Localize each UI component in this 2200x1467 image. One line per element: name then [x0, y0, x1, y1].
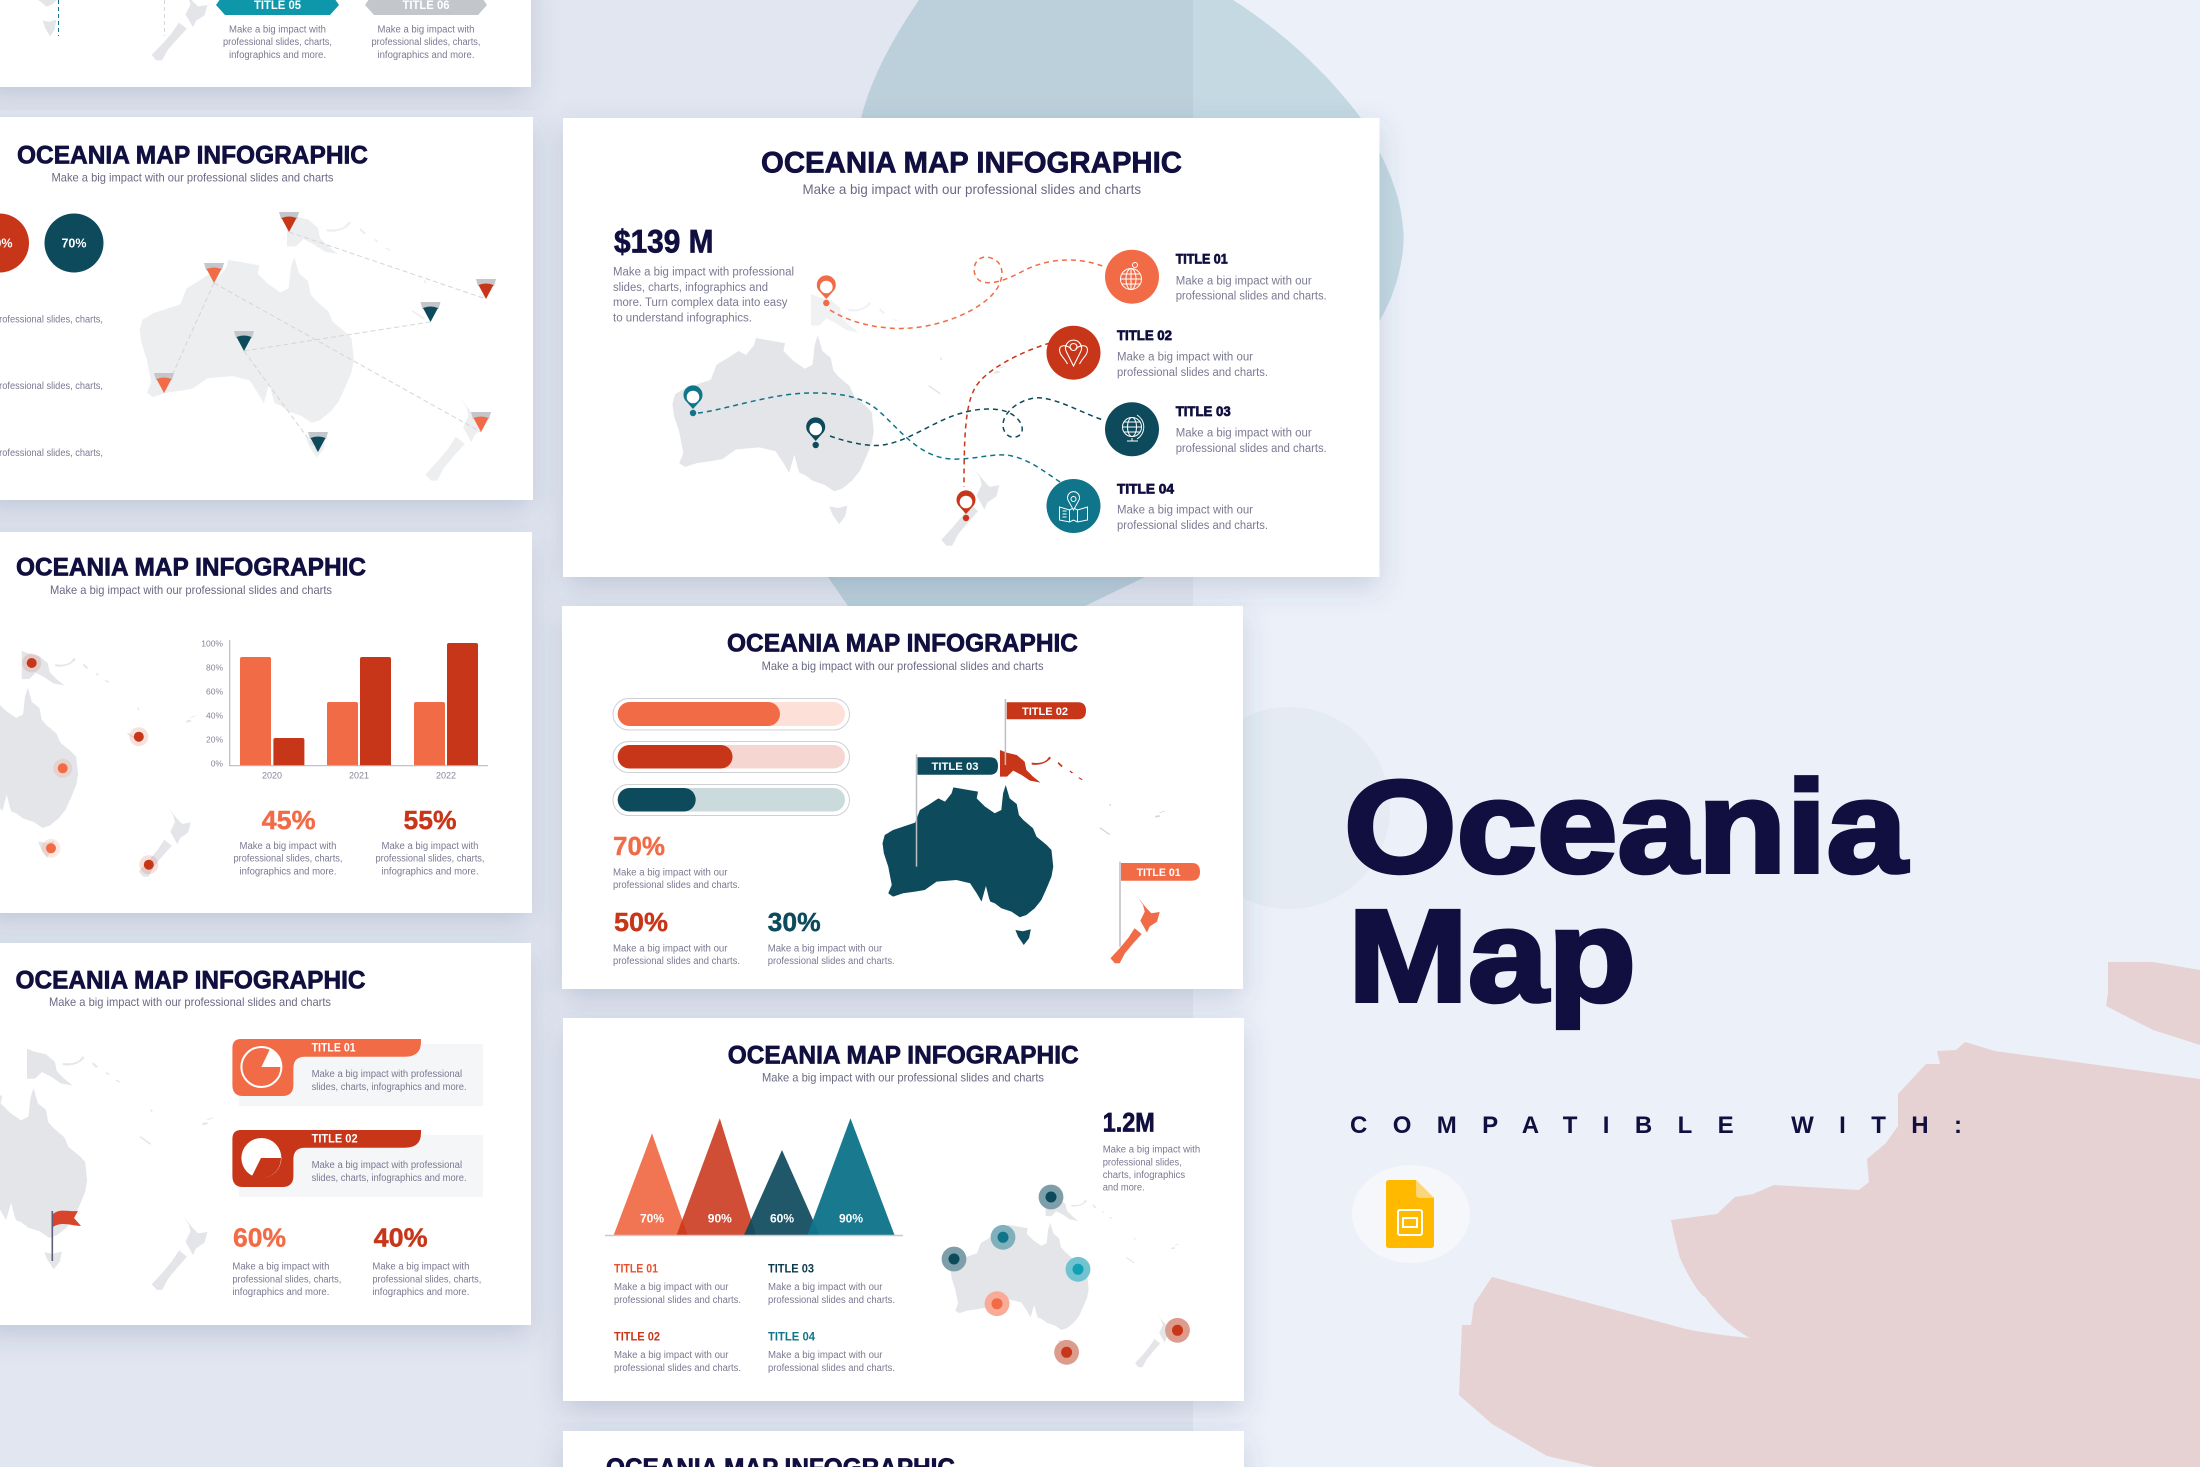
- text block: Make a big impact with: [1103, 1144, 1200, 1156]
- bar chart: 2022: [436, 770, 456, 780]
- text: title 03: [768, 1261, 895, 1306]
- map: [140, 213, 494, 481]
- connection lines: [164, 232, 486, 452]
- bar chart: 60%: [206, 686, 223, 696]
- map fragment: [38, 0, 208, 60]
- panel: cropped bottom slide: [563, 1431, 1244, 1467]
- text: title 01: [614, 1261, 741, 1306]
- main title: Map: [1348, 882, 1636, 1029]
- subheading: Make a big impact with our professional slides and charts: [762, 1071, 1044, 1085]
- heading: OCEANIA MAP INFOGRAPHIC: [17, 142, 368, 170]
- text: title 04: [1117, 480, 1268, 532]
- stat 40%: 40%: [374, 1222, 428, 1252]
- text block: charts, infographics: [1103, 1170, 1185, 1181]
- text: title 01: TITLE 01: [614, 1261, 658, 1275]
- text: title 06 description: Make a big impact with: [378, 24, 474, 36]
- heading: OCEANIA MAP INFOGRAPHIC: [728, 1041, 1079, 1069]
- stat 45%: infographics and more.: [240, 866, 336, 877]
- bar chart: 0%: [211, 758, 223, 768]
- stat: 1.2M: 1.2M: [1103, 1108, 1155, 1138]
- icon: flag: [52, 1211, 81, 1261]
- subheading: Make a big impact with our professional slides and charts: [52, 170, 334, 184]
- bar chart: 80%: [206, 662, 223, 672]
- text block: slides, charts, infographics and: [613, 282, 768, 294]
- banner: title 06: [365, 0, 487, 15]
- icon: globe on stand (title 03): [1105, 402, 1159, 456]
- stat 60%: infographics and more.: [232, 1287, 329, 1298]
- stat 70%: 70%: [613, 831, 665, 861]
- text: title 04: professional slides and charts.: [768, 1363, 895, 1374]
- text: title 06 description: infographics and more.: [378, 50, 474, 61]
- heading: OCEANIA MAP INFOGRAPHIC: [761, 146, 1182, 180]
- dashed route: orange: [830, 257, 1105, 328]
- text: title 02: TITLE 02: [1117, 327, 1172, 343]
- card: title 02: TITLE 02: [312, 1134, 358, 1146]
- text: title 02: Make a big impact with our: [1117, 352, 1253, 364]
- triangle chart: 70%: [640, 1211, 664, 1225]
- panel: triangle chart slide: [563, 1018, 1244, 1401]
- stat 55%: [376, 805, 484, 877]
- triangle chart: 60%: [770, 1211, 794, 1225]
- map: [0, 651, 196, 877]
- subheading: Make a big impact with our professional slides and charts: [49, 995, 331, 1009]
- triangle chart: 90%: [839, 1211, 863, 1225]
- flag: title 02: TITLE 02: [1022, 706, 1068, 718]
- stat 60%: professional slides, charts,: [232, 1274, 341, 1286]
- stat 50%: [613, 907, 740, 967]
- pin: orange: [817, 275, 836, 306]
- dashed route: red: [964, 343, 1050, 487]
- text: title 02: professional slides and charts.: [614, 1363, 741, 1374]
- dashed route: teal: [698, 393, 1060, 482]
- card: title 01: TITLE 01: [312, 1042, 356, 1054]
- panel: pie cards slide: [0, 943, 531, 1325]
- text: title 02: professional slides and charts.: [1117, 367, 1268, 379]
- stat 45%: Make a big impact with: [240, 841, 336, 852]
- text: title 03: Make a big impact with our: [1176, 428, 1312, 440]
- stat 40%: infographics and more.: [372, 1287, 469, 1298]
- text block: [1103, 1144, 1200, 1194]
- text: title 03: professional slides and charts.: [1176, 443, 1327, 455]
- flag: title 03: TITLE 03: [932, 761, 978, 773]
- heading: OCEANIA MAP INFOGRAPHIC: [16, 966, 366, 994]
- percent circle: teal: 70%: [61, 236, 87, 250]
- text: title 05 description: infographics and more.: [229, 50, 326, 61]
- flag: title 01: TITLE 01: [1137, 867, 1181, 879]
- map: highlighted regions: [883, 750, 1165, 963]
- stat 55%: professional slides, charts,: [376, 854, 484, 865]
- bar chart: [201, 638, 488, 780]
- stat 60%: [232, 1222, 341, 1298]
- bar chart: 100%: [201, 638, 223, 648]
- stat 45%: [234, 805, 342, 877]
- decorative pink shape: upper right: [2106, 962, 2200, 1045]
- progress bar 30%: [613, 784, 850, 816]
- stat 30%: Make a big impact with our: [768, 944, 883, 954]
- text: title 04: TITLE 04: [768, 1330, 815, 1344]
- stat 50%: professional slides and charts.: [613, 956, 740, 967]
- stat 70%: professional slides and charts.: [613, 880, 740, 891]
- main title: Oceania: [1344, 753, 1908, 900]
- stat 55%: 55%: [404, 805, 456, 835]
- text: title 03: TITLE 03: [1176, 403, 1231, 419]
- text block: and more.: [1103, 1183, 1145, 1194]
- progress bar 70%: [613, 698, 850, 730]
- text: title 06 description: professional slides, charts,: [372, 37, 480, 48]
- text: title 02: Make a big impact with our: [614, 1350, 729, 1361]
- stat 30%: [768, 907, 895, 967]
- text: title 02: [614, 1330, 741, 1374]
- card: title 02: [232, 1130, 483, 1197]
- bar chart: 2021: [349, 770, 369, 780]
- stat 50%: 50%: [614, 907, 668, 937]
- percent circle: teal: [44, 214, 104, 272]
- stat 40%: [372, 1222, 481, 1298]
- text: title 03: professional slides and charts.: [768, 1295, 895, 1306]
- bar chart: 2020: [262, 770, 282, 780]
- card: title 02: Make a big impact with professional: [312, 1160, 462, 1171]
- text: title 05 description: [223, 24, 332, 61]
- flag: title 01: [1120, 862, 1200, 947]
- flag: title 03: [916, 754, 998, 867]
- stat 40%: Make a big impact with: [372, 1262, 469, 1272]
- stat 40%: professional slides, charts,: [372, 1274, 481, 1286]
- text: title 03: [1176, 403, 1327, 455]
- triangle chart: [605, 1118, 903, 1236]
- panel: main route map slide: [563, 118, 1380, 577]
- text: title 04: TITLE 04: [1117, 480, 1174, 496]
- text: title 02: TITLE 02: [614, 1330, 660, 1344]
- text: title 01: Make a big impact with our: [614, 1282, 729, 1293]
- text: title 05 description: Make a big impact with: [229, 24, 326, 36]
- stat 70%: [613, 831, 740, 891]
- panel: top-left cropped slide: [0, 0, 531, 87]
- markers: [154, 212, 496, 452]
- text: title 01: professional slides and charts.: [1176, 290, 1327, 302]
- flag: title 02: [1005, 699, 1086, 765]
- card: title 01: slides, charts, infographics and more.: [312, 1082, 467, 1093]
- stat 55%: Make a big impact with: [382, 841, 478, 852]
- text: title 01: TITLE 01: [1176, 250, 1228, 266]
- stat 50%: Make a big impact with our: [613, 944, 728, 954]
- stat 55%: infographics and more.: [382, 866, 478, 877]
- card: title 02: slides, charts, infographics and more.: [312, 1173, 467, 1184]
- text block: Make a big impact with professional: [613, 266, 794, 278]
- progress bar 50%: [613, 742, 850, 772]
- panel: progress bars and flags slide: [562, 606, 1243, 989]
- banner: title 05: [216, 0, 339, 15]
- panel: bar chart slide: [0, 532, 532, 913]
- main title: [1344, 753, 1908, 1029]
- text: title 04: [768, 1330, 895, 1374]
- decorative pink shape: lower right: [1459, 1042, 2200, 1467]
- text lines: [0, 314, 103, 459]
- text block: professional slides,: [1103, 1158, 1182, 1168]
- percent circle: red: [0, 214, 29, 272]
- stat: $139 M: $139 M: [614, 224, 714, 260]
- text: title 01: Make a big impact with our: [1176, 276, 1312, 288]
- stat 30%: professional slides and charts.: [768, 956, 895, 967]
- stat 45%: 45%: [262, 805, 316, 835]
- icon: google slides: [1352, 1165, 1470, 1263]
- icon: three pins (title 02): [1046, 326, 1100, 380]
- map dots: [942, 1185, 1190, 1365]
- pin: red: [956, 490, 976, 521]
- pin: teal: [684, 385, 702, 416]
- text: title 03: Make a big impact with our: [768, 1282, 883, 1293]
- stat 60%: 60%: [233, 1222, 286, 1252]
- text: title 01: [1176, 250, 1327, 302]
- stat 45%: professional slides, charts,: [234, 854, 342, 865]
- subheading: Make a big impact with our professional slides and charts: [762, 659, 1044, 673]
- triangle chart: 90%: [708, 1211, 732, 1225]
- icon: map with pin (title 04): [1046, 479, 1100, 533]
- bar chart: 40%: [206, 710, 223, 720]
- map: [0, 1049, 213, 1290]
- map: [672, 294, 1006, 546]
- bar chart: 20%: [206, 734, 223, 744]
- icon: globe with pin (title 01): [1105, 250, 1159, 304]
- compatible with label: COMPATIBLE WITH:: [1350, 1112, 1962, 1139]
- subheading: Make a big impact with our professional slides and charts: [802, 181, 1141, 197]
- stat 60%: Make a big impact with: [232, 1262, 329, 1272]
- heading: OCEANIA MAP INFOGRAPHIC: [16, 554, 366, 582]
- text block: [613, 266, 794, 324]
- pin: dark teal: [806, 417, 825, 448]
- text block: to understand infographics.: [613, 312, 752, 324]
- text: title 06 description: [372, 24, 480, 61]
- text: title 04: Make a big impact with our: [768, 1350, 883, 1361]
- text: title 03: TITLE 03: [768, 1261, 814, 1275]
- text: title 04: professional slides and charts.: [1117, 520, 1268, 532]
- text: title 05 description: professional slides, charts,: [223, 37, 332, 48]
- card: title 01: Make a big impact with professional: [312, 1069, 462, 1080]
- text block: more. Turn complex data into easy: [613, 297, 788, 309]
- stat 70%: Make a big impact with our: [613, 868, 728, 878]
- map: [951, 1194, 1179, 1367]
- map dots: [22, 654, 158, 874]
- text: title 01: professional slides and charts.: [614, 1295, 741, 1306]
- card: title 01: [232, 1039, 483, 1106]
- heading: OCEANIA MAP INFOGRAPHIC: [727, 630, 1078, 658]
- text: title 04: Make a big impact with our: [1117, 504, 1253, 516]
- dashed route: dark teal: [830, 398, 1103, 446]
- text: title 02: [1117, 327, 1268, 379]
- subheading: Make a big impact with our professional slides and charts: [50, 583, 332, 597]
- stat 30%: 30%: [768, 907, 821, 937]
- panel: map with markers slide: [0, 117, 533, 500]
